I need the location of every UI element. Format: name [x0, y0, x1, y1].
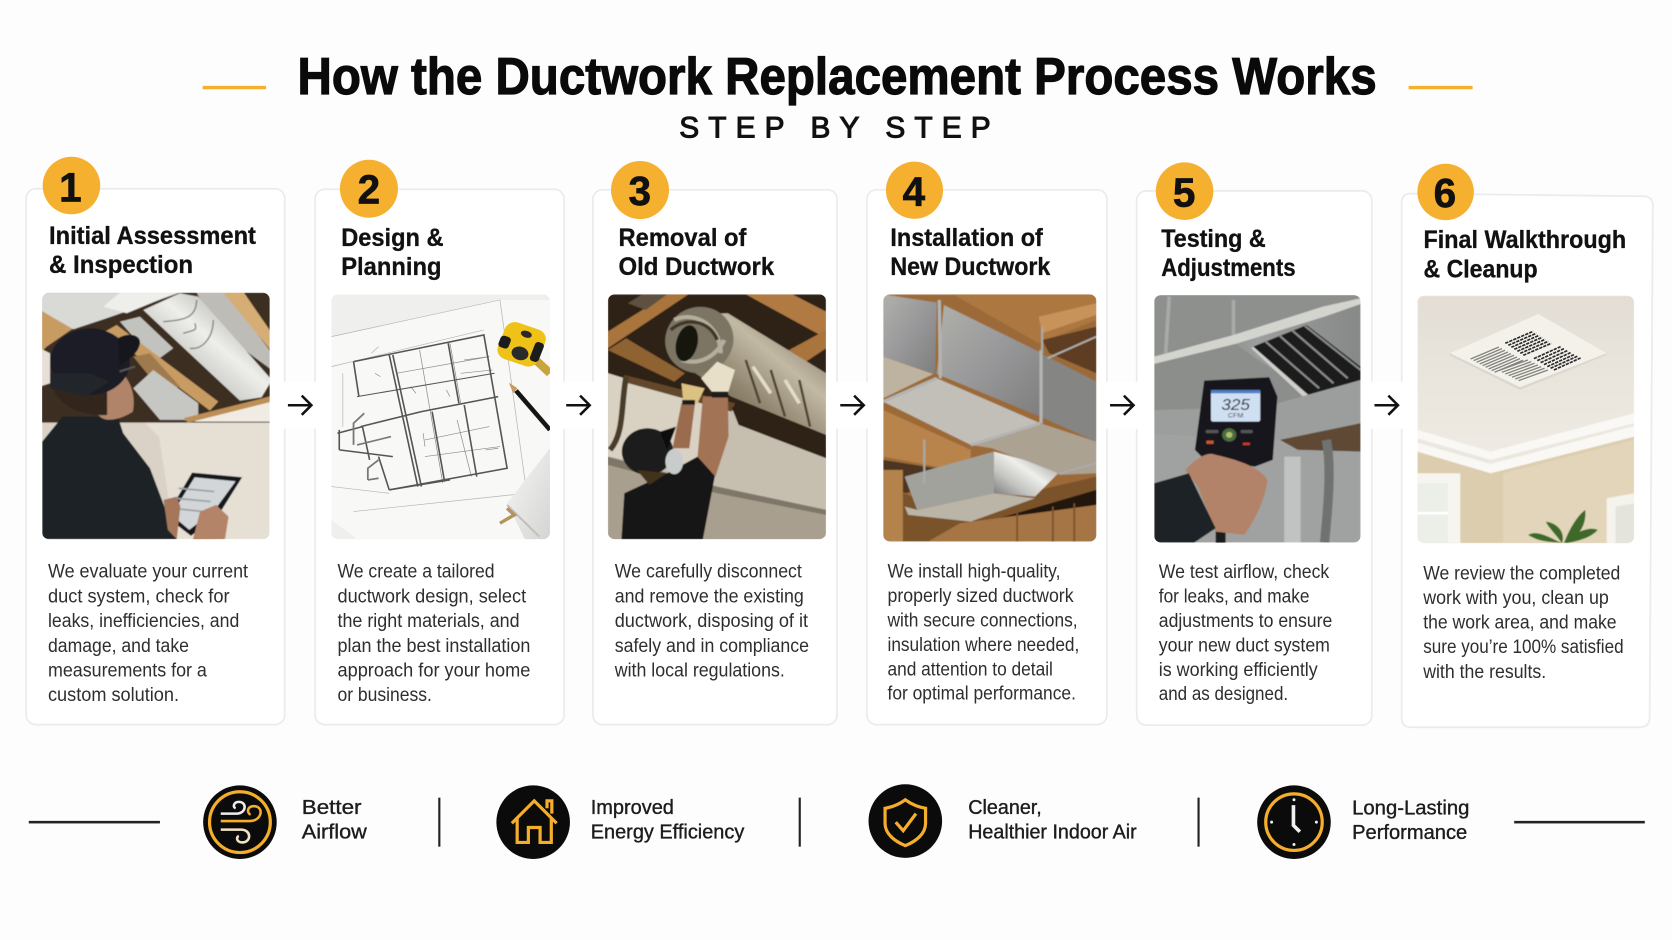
card 2 description: or business. [337, 685, 432, 706]
card 4 description: with secure connections, [887, 610, 1078, 631]
card 2 description: ductwork design, select [337, 586, 527, 607]
card 2 panel [315, 160, 564, 725]
card 6 description: with the results. [1422, 662, 1546, 683]
card 6 description: the work area, and make [1423, 613, 1617, 634]
card 6 description [1422, 564, 1624, 683]
card 3 number badge: 3 [629, 168, 651, 214]
icon: wind [203, 785, 277, 859]
label: Airflow [302, 822, 367, 844]
card 2 description: approach for your home [337, 660, 530, 681]
label: Better [302, 797, 362, 819]
card 6 heading: Final Walkthrough [1424, 226, 1626, 254]
card 3 panel [593, 161, 837, 725]
card 5 frame [1137, 191, 1372, 725]
card 2 number badge [340, 160, 398, 218]
card 5 heading [1161, 225, 1296, 282]
benefit: better airflow [203, 785, 367, 859]
card 3 heading [618, 224, 774, 281]
card 5 number badge [1156, 162, 1213, 220]
arrow 2 [559, 382, 599, 429]
arrow 4 [1102, 382, 1142, 429]
benefit: healthier air [869, 784, 1137, 858]
label: Performance [1352, 822, 1467, 844]
card 5 description: is working efficiently [1159, 660, 1318, 681]
card 4 description: properly sized ductwork [888, 586, 1074, 607]
label: Cleaner, [968, 797, 1042, 819]
card 6 heading [1424, 226, 1626, 283]
card 1 heading: Initial Assessment [49, 222, 257, 250]
card 1 description: measurements for a [48, 660, 207, 681]
arrow 3 [832, 382, 872, 429]
card 4 heading: New Ductwork [890, 253, 1050, 281]
card 1 panel [26, 157, 285, 725]
photo: finished room with ceiling [1417, 296, 1634, 543]
card 1 frame [26, 189, 285, 725]
card 2 heading: Design & [341, 224, 444, 252]
card 6 number badge: 6 [1434, 170, 1456, 216]
card 6 description: sure you’re 100% satisfied [1423, 637, 1624, 658]
card 2 heading [341, 224, 444, 281]
benefits strip [29, 784, 1645, 859]
label: Improved [591, 797, 674, 819]
card 4 heading [890, 224, 1050, 281]
card 5 heading: Adjustments [1161, 254, 1296, 282]
card 5 description: adjustments to ensure [1159, 611, 1332, 632]
card 3 description: ductwork, disposing of it [615, 611, 809, 632]
card 4 description [887, 561, 1079, 705]
right title accent [1409, 86, 1473, 89]
card 4 description: for optimal performance. [888, 684, 1076, 705]
title block [203, 48, 1473, 145]
card 6 description: We review the completed [1423, 564, 1620, 585]
label [591, 797, 745, 844]
photo: airflow meter reading in hand: 325 [1221, 395, 1251, 414]
icon: house [496, 785, 570, 859]
title: How the Ductwork Replacement Process Works [298, 48, 1377, 106]
arrow 5 [1366, 382, 1406, 429]
card 3 description: safely and in compliance [615, 636, 809, 657]
card 4 description: and attention to detail [888, 659, 1053, 680]
card 3 frame [593, 190, 837, 725]
card 4 number badge [886, 162, 943, 219]
card 3 description: with local regulations. [614, 660, 785, 681]
card 5 description: your new duct system [1159, 635, 1330, 656]
card 6 heading: & Cleanup [1424, 255, 1538, 283]
photo: worker removing old duct [608, 294, 826, 539]
card 4 heading: Installation of [890, 224, 1043, 252]
label [302, 797, 367, 844]
card 4 frame [867, 190, 1107, 725]
card 1 number badge [43, 157, 100, 214]
benefit: long-lasting performance [1257, 785, 1469, 859]
photo: new galvanized ductwork installed [883, 294, 1096, 542]
benefit: energy efficiency [496, 785, 745, 859]
card 2 description: the right materials, and [337, 611, 520, 632]
icon: clock [1257, 785, 1331, 859]
card 3 heading: Old Ductwork [618, 253, 774, 281]
card 1 description: duct system, check for [48, 586, 230, 607]
card 3 heading: Removal of [618, 224, 747, 252]
left title accent [203, 86, 266, 89]
photo: airflow meter reading in hand: CFM [1228, 412, 1244, 419]
card 3 description [614, 561, 809, 681]
card 5 heading: Testing & [1161, 225, 1266, 253]
card 1 description: damage, and take [48, 636, 189, 657]
card 2 description: We create a tailored [337, 561, 495, 582]
card 2 heading: Planning [341, 253, 441, 281]
card 1 description: leaks, inefficiencies, and [48, 611, 239, 632]
card 4 description: We install high-quality, [888, 561, 1060, 582]
card 5 description: We test airflow, check [1159, 562, 1330, 583]
card 1 heading [49, 222, 257, 279]
icon: ceiling vent [1450, 314, 1607, 390]
card 4 description: insulation where needed, [888, 635, 1079, 656]
card 1 description: custom solution. [48, 685, 179, 706]
card 3 description: We carefully disconnect [615, 561, 802, 582]
card 4 number badge: 4 [903, 169, 926, 215]
card 4 panel [867, 162, 1107, 725]
card 6 number badge [1417, 164, 1474, 220]
card 1 description: We evaluate your current [48, 561, 249, 582]
arrow 1 [279, 382, 320, 429]
card 1 heading: & Inspection [49, 251, 193, 279]
card 1 number badge: 1 [59, 165, 82, 211]
card 6 frame [1402, 194, 1653, 727]
photo: technician inspecting ducts with tablet [40, 293, 272, 540]
photo: airflow meter reading in hand [1154, 295, 1361, 543]
card 1 description [48, 561, 249, 706]
photo: blueprint with tape measure and pencil [331, 294, 550, 539]
card 2 description: plan the best installation [337, 636, 530, 657]
label: Energy Efficiency [591, 822, 745, 844]
card 2 number badge: 2 [358, 167, 380, 213]
card 2 frame [315, 189, 564, 725]
card 5 description: and as designed. [1159, 684, 1288, 705]
card 2 description [337, 561, 530, 706]
label [1352, 798, 1469, 844]
label: Healthier Indoor Air [968, 822, 1137, 844]
card 3 number badge [611, 161, 669, 219]
icon: shield [869, 784, 942, 858]
card 5 description: for leaks, and make [1159, 586, 1309, 607]
card 5 description [1159, 562, 1332, 705]
subtitle: STEP BY STEP [679, 112, 991, 145]
card 5 panel [1137, 162, 1372, 725]
card 5 number badge: 5 [1173, 169, 1195, 215]
card 3 description: and remove the existing [615, 586, 804, 607]
card 6 panel [1402, 164, 1653, 727]
label [968, 797, 1137, 844]
label: Long-Lasting [1352, 798, 1469, 820]
card 6 description: work with you, clean up [1422, 588, 1609, 609]
